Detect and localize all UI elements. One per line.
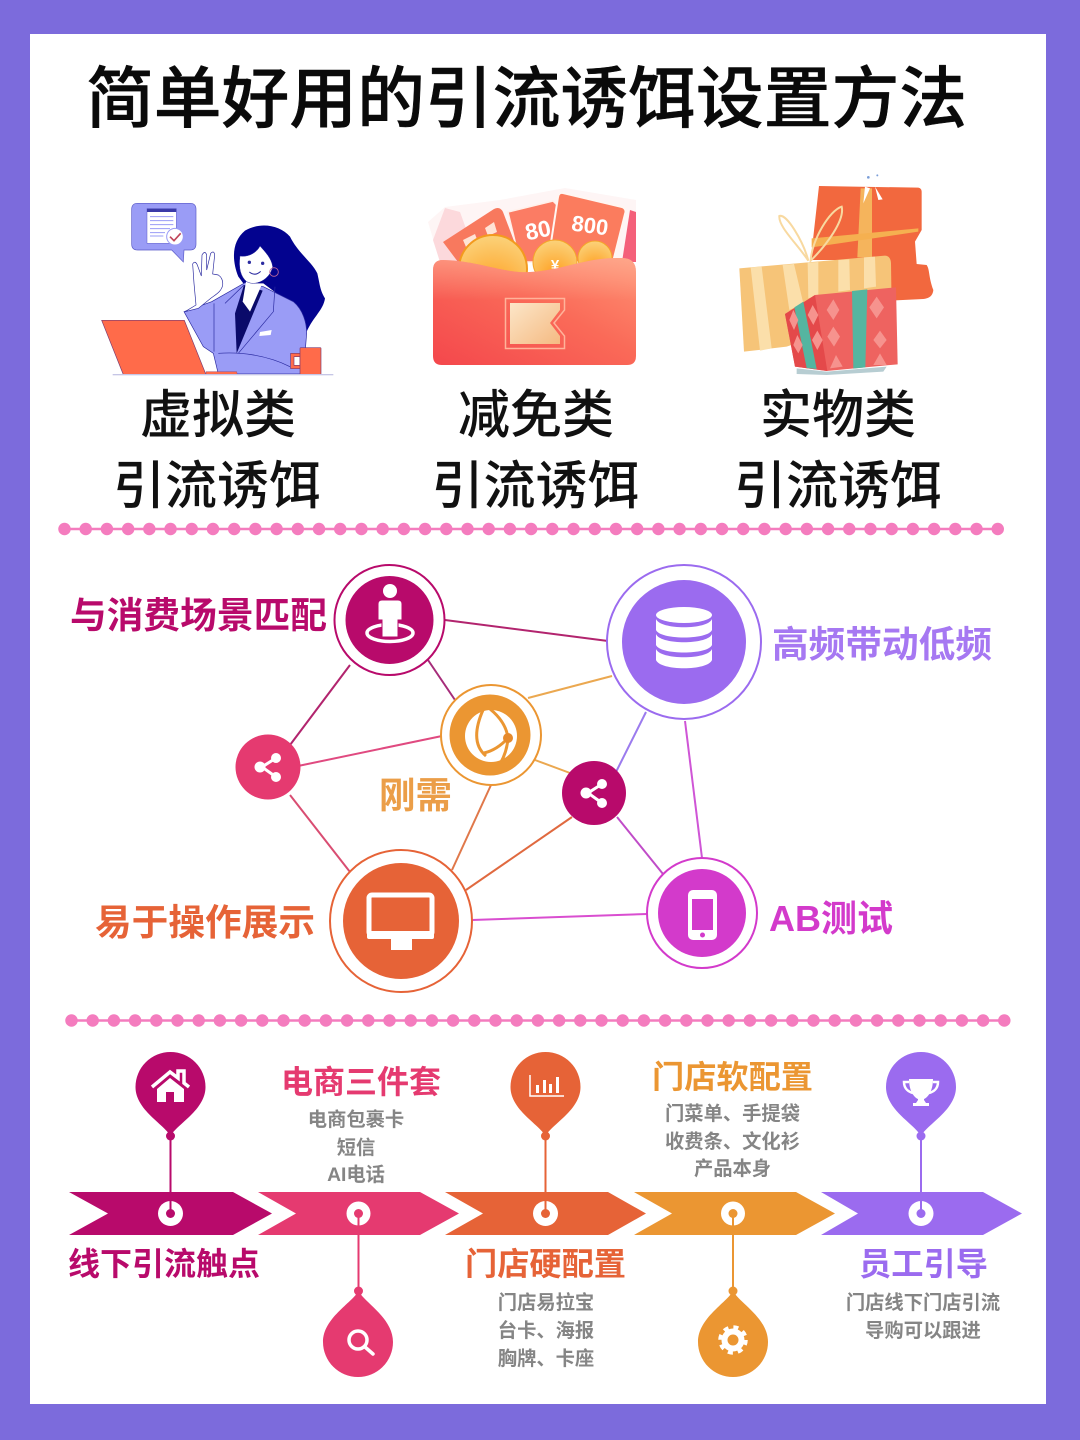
heading: store hard setup with list: 门店硬配置 <box>465 1246 626 1282</box>
mug <box>291 335 321 374</box>
coins <box>459 235 527 303</box>
step 3 arrow <box>445 1192 646 1235</box>
heading: staff guidance with list: 导购可以跟进 <box>865 1320 981 1342</box>
heading: store soft setup with list: 产品本身 <box>694 1158 771 1180</box>
category label: virtual: 引流诱饵 <box>113 458 321 516</box>
heading: ecommerce kit with list: 电商包裹卡 <box>308 1109 404 1131</box>
heading: ecommerce kit with list <box>281 1064 441 1186</box>
category label: discount <box>431 387 640 516</box>
timeline <box>68 1052 1022 1377</box>
node: share left <box>236 734 300 800</box>
category label: physical: 实物类 <box>760 387 916 445</box>
category label: virtual <box>113 387 321 516</box>
ticket <box>506 298 564 348</box>
coupon 800 <box>548 193 626 262</box>
node: phone <box>647 858 757 968</box>
speech bubble with checklist <box>132 203 196 262</box>
node: database <box>607 565 761 719</box>
illustration: gift boxes <box>739 174 933 375</box>
illustration: red envelope with coupons: 80 <box>523 215 553 245</box>
heading: staff guidance with list: 门店线下门店引流 <box>846 1292 1000 1314</box>
node: share right <box>562 761 626 825</box>
heading: staff guidance with list: 员工引导 <box>859 1246 988 1282</box>
step markers <box>158 1201 934 1226</box>
pin: chart <box>510 1052 580 1140</box>
connection lines <box>290 620 702 920</box>
heading: ecommerce kit with list: 电商三件套 <box>281 1064 441 1100</box>
envelope body <box>433 258 636 365</box>
heading: staff guidance with list <box>846 1246 1000 1342</box>
category label: discount: 引流诱饵 <box>431 458 640 516</box>
coupon 80 <box>508 201 557 262</box>
heading: ecommerce kit with list: AI电话 <box>327 1164 385 1186</box>
bow <box>779 207 842 261</box>
heading: store soft setup with list: 门店软配置 <box>652 1059 813 1095</box>
node: scene <box>334 565 444 675</box>
face <box>239 246 273 283</box>
label: AB test: AB测试 <box>769 898 893 939</box>
diamonds <box>789 297 887 368</box>
label: essential need: 刚需 <box>379 775 452 816</box>
pin: search <box>323 1286 393 1377</box>
pin: trophy <box>886 1052 956 1140</box>
heading: offline touchpoints: 线下引流触点 <box>68 1246 260 1282</box>
illustration: red envelope with coupons <box>428 188 636 365</box>
hair <box>234 226 325 332</box>
heading: store soft setup with list <box>652 1059 813 1180</box>
ribbon <box>857 188 872 257</box>
desk line <box>113 374 333 375</box>
node: globe <box>441 685 541 785</box>
heading: store hard setup with list: 台卡、海报 <box>498 1319 594 1342</box>
illustration: red envelope with coupons: 800 <box>570 211 610 240</box>
pale flap <box>428 188 636 262</box>
envelope highlight <box>433 258 636 300</box>
pin stems <box>170 1136 921 1291</box>
label: scene match: 与消费场景匹配 <box>70 595 327 636</box>
category label: virtual: 虚拟类 <box>140 387 296 445</box>
laptop <box>102 320 206 375</box>
heading: store hard setup with list <box>465 1246 626 1370</box>
heading: store hard setup with list: 门店易拉宝 <box>498 1291 594 1314</box>
label: high frequency: 高频带动低频 <box>772 624 992 665</box>
teal stripes <box>794 302 817 369</box>
node: monitor <box>330 850 472 992</box>
illustration: red envelope with coupons: ¥ <box>551 257 560 274</box>
pin: home <box>136 1052 206 1140</box>
category label: physical: 引流诱饵 <box>734 458 942 516</box>
ground shadow <box>797 367 887 375</box>
cream box <box>739 256 892 352</box>
shirt <box>235 285 263 353</box>
heading: store soft setup with list: 门菜单、手提袋 <box>665 1103 800 1125</box>
heading: ecommerce kit with list: 短信 <box>337 1137 375 1159</box>
heading: store hard setup with list: 胸牌、卡座 <box>498 1347 594 1370</box>
back box <box>811 186 933 301</box>
step 1 arrow <box>69 1192 272 1235</box>
jacket <box>184 283 307 374</box>
step 4 arrow <box>634 1192 835 1235</box>
heading: store soft setup with list: 收费条、文化衫 <box>665 1130 800 1153</box>
red box <box>785 287 898 371</box>
network chart <box>70 565 992 992</box>
illustration: woman at laptop <box>102 203 333 375</box>
pin: gear <box>698 1286 768 1377</box>
category label: physical <box>734 387 942 516</box>
step 5 arrow <box>821 1192 1022 1235</box>
coupon left <box>443 208 522 262</box>
category label: discount: 减免类 <box>458 387 614 445</box>
step 2 arrow <box>258 1192 459 1235</box>
title: 简单好用的引流诱饵设置方法 <box>86 62 967 137</box>
label: easy to demo: 易于操作展示 <box>95 902 315 943</box>
hand OK <box>185 252 223 312</box>
